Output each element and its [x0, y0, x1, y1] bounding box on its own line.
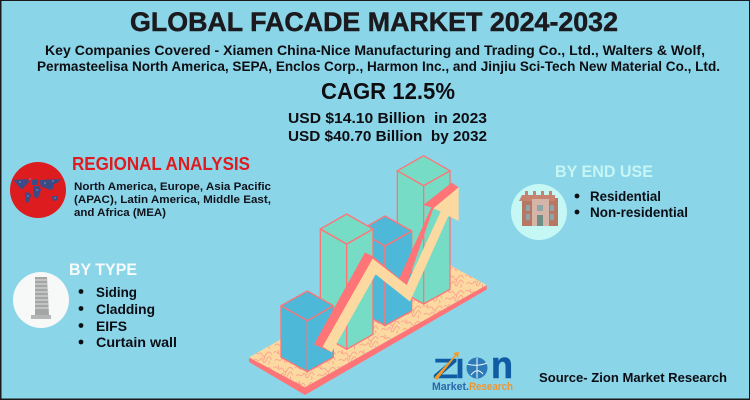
icon: building	[511, 184, 567, 240]
heading: by type: BY TYPE	[69, 261, 137, 279]
title: GLOBAL FACADE MARKET 2024-2032	[130, 7, 618, 37]
market size values: USD $14.10 Billion in 2023	[288, 111, 487, 127]
logo: Zion Market Research: I	[456, 353, 464, 384]
growth arrow	[314, 183, 459, 352]
key companies text: Permasteelisa North America, SEPA, Enclos Corp., Harmon Inc., and Jinjiu Sci-Tech New Material Co., Ltd.	[37, 59, 720, 74]
icon: facade tower	[13, 272, 69, 328]
type list: Siding	[96, 284, 137, 300]
panel: by type	[13, 261, 177, 350]
type list	[79, 284, 177, 350]
market size values	[288, 111, 487, 145]
regions text: North America, Europe, Asia Pacific	[74, 181, 271, 193]
icon: world map	[10, 162, 66, 218]
type list: EIFS	[96, 318, 127, 334]
regions text	[74, 181, 271, 219]
key companies text: Key Companies Covered - Xiamen China-Nice Manufacturing and Trading Co., Ltd., Walters & Wolf,	[45, 43, 705, 58]
globe	[466, 358, 488, 378]
logo: Zion Market Research: Z	[433, 353, 458, 384]
source text: Source- Zion Market Research	[539, 370, 727, 385]
heading: regional analysis: REGIONAL ANALYSIS	[72, 154, 250, 174]
platform	[249, 255, 487, 395]
heading: by end use: BY END USE	[555, 163, 653, 181]
key companies text	[37, 43, 720, 74]
end use list: Residential	[590, 189, 661, 204]
bar 2	[320, 214, 373, 349]
chart: isometric rising bars	[249, 156, 487, 395]
panel: by end use	[511, 163, 688, 240]
type list: Curtain wall	[96, 334, 177, 350]
logo: Zion Market Research: n	[491, 345, 513, 387]
type list: Cladding	[96, 301, 155, 317]
panel: regional analysis	[10, 154, 271, 219]
bar 1	[281, 291, 333, 372]
market size values: USD $40.70 Billion by 2032	[288, 129, 487, 145]
logo: Zion Market Research: Research	[469, 381, 513, 393]
bar 4	[397, 156, 450, 304]
end use list	[575, 189, 688, 220]
bar 3	[359, 216, 412, 326]
regions text: and Africa (MEA)	[74, 207, 166, 219]
CAGR heading: CAGR 12.5%	[321, 78, 455, 104]
logo: Zion Market Research	[432, 345, 513, 393]
logo: Zion Market Research: Market.	[432, 381, 469, 393]
regions text: (APAC), Latin America, Middle East,	[74, 194, 271, 206]
end use list: Non-residential	[590, 205, 688, 220]
